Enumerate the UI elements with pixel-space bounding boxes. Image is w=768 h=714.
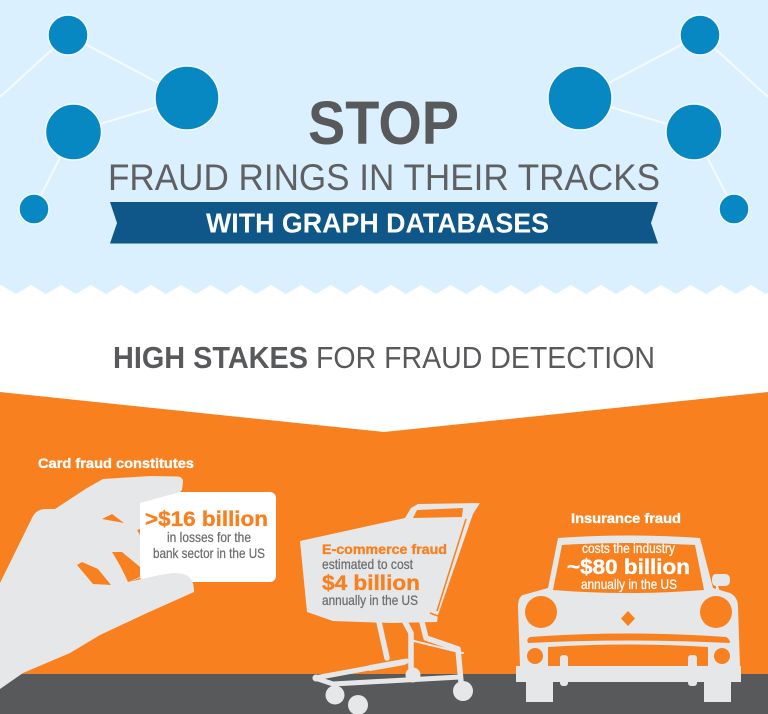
card description: in losses for the (167, 529, 251, 545)
card fraud label: Card fraud constitutes (38, 455, 194, 471)
card amount: >$16 billion (145, 508, 268, 531)
white card (140, 492, 276, 582)
hood emblem (621, 611, 635, 626)
hood bar (527, 634, 730, 643)
headlights (525, 596, 732, 664)
e-commerce label: E-commerce fraud (322, 541, 447, 557)
insurance label: Insurance fraud (571, 510, 681, 526)
panel: header (0, 0, 768, 294)
bumper guards (560, 655, 697, 686)
cart hub (406, 668, 420, 682)
cart basket (300, 503, 480, 623)
panel: insurance fraud (516, 510, 741, 702)
hand gaps (77, 514, 140, 585)
orange background panel (0, 392, 768, 714)
subtitle: FRAUD RINGS IN THEIR TRACKS (108, 156, 660, 198)
grille (548, 644, 708, 666)
title: STOP: STOP (308, 89, 459, 157)
e-commerce amount: $4 billion (322, 572, 420, 595)
section heading: HIGH STAKES (113, 340, 308, 375)
header background with zigzag edge (0, 0, 768, 294)
basket edge line (430, 519, 466, 616)
cart wheels (312, 659, 473, 714)
card description line 2: bank sector in the US (153, 545, 265, 561)
icon: hand (0, 476, 194, 689)
ribbon banner (110, 202, 658, 244)
ground band (0, 674, 768, 714)
panel: card fraud (0, 455, 276, 689)
cart frame (315, 622, 463, 684)
panel: e-commerce fraud (300, 503, 480, 714)
car body (516, 536, 741, 702)
graph network right (548, 15, 768, 224)
car mirror (712, 574, 730, 592)
insurance description: costs the industry (582, 540, 675, 556)
graph network left (0, 15, 219, 224)
icon: car (516, 536, 741, 702)
section heading: FOR FRAUD DETECTION (316, 340, 655, 375)
e-commerce description: estimated to cost (322, 556, 413, 572)
icon: shopping cart (300, 503, 480, 714)
insurance description line 2: annually in the US (581, 576, 677, 592)
e-commerce description line 2: annually in the US (322, 592, 418, 608)
section heading (113, 340, 655, 375)
windshield (553, 543, 704, 593)
insurance amount: ~$80 billion (567, 556, 690, 579)
ribbon banner: WITH GRAPH DATABASES (206, 208, 549, 238)
